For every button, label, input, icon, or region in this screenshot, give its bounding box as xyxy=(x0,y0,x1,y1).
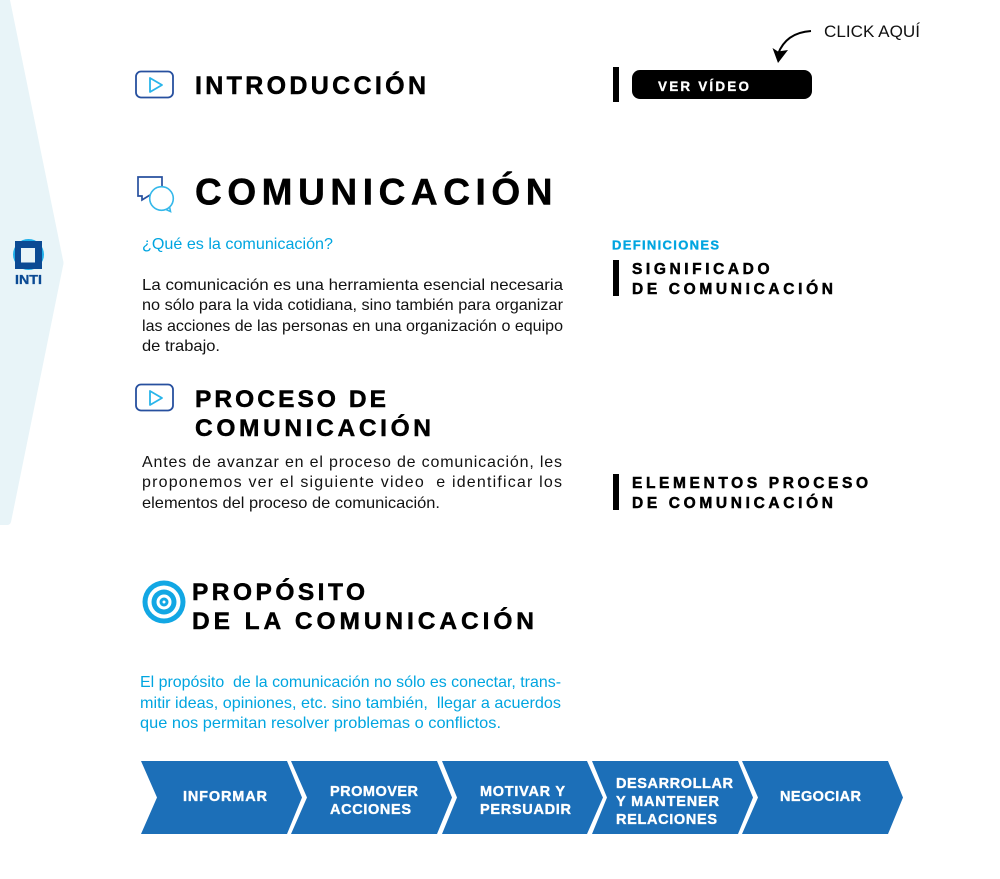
heading: comunicación: COMUNICACIÓN xyxy=(195,170,552,212)
accent bar: significado xyxy=(613,260,619,296)
icon: video proceso xyxy=(136,384,173,410)
link: elementos xyxy=(632,475,868,512)
icon: target xyxy=(142,580,186,624)
button: ver vídeo xyxy=(632,70,812,99)
step: promover acciones: ACCIONES xyxy=(330,802,411,818)
chevron process xyxy=(141,761,903,834)
step: informar: INFORMAR xyxy=(183,789,268,805)
text block: definition: de trabajo. xyxy=(142,338,220,355)
text block: definition: La comunicación es una herramienta esencial necesaria xyxy=(142,277,563,294)
definiciones label: DEFINICIONES xyxy=(612,238,719,252)
step: motivar y persuadir: PERSUADIR xyxy=(480,802,572,818)
INTI logo xyxy=(13,239,44,287)
icon: video intro xyxy=(136,72,173,98)
text block: proceso: proponemos ver el siguiente video e identificar los xyxy=(142,474,562,491)
accent bar: video xyxy=(613,67,619,102)
click label: CLICK AQUÍ xyxy=(824,22,920,41)
step: negociar: NEGOCIAR xyxy=(780,789,862,805)
step: desarrollar xyxy=(592,761,753,834)
heading: proceso: PROCESO DE xyxy=(195,386,386,413)
text block: definition xyxy=(142,277,564,355)
accent bar: elementos xyxy=(613,474,619,510)
subheading: question: ¿Qué es la comunicación? xyxy=(142,236,333,253)
step: motivar y persuadir: MOTIVAR Y xyxy=(480,784,565,800)
text block: definition: las acciones de las personas en una organización o equipo xyxy=(142,318,563,335)
text block: proceso: Antes de avanzar en el proceso de comunicación, les xyxy=(142,454,562,471)
link: elementos: DE COMUNICACIÓN xyxy=(632,494,833,512)
step: negociar xyxy=(742,761,903,834)
text block: propósito: El propósito de la comunicación no sólo es conectar, trans- xyxy=(140,674,561,691)
step: motivar y persuadir xyxy=(442,761,603,834)
heading: proceso: COMUNICACIÓN xyxy=(195,414,431,442)
text block: definition: no sólo para la vida cotidiana, sino también para organizar xyxy=(142,297,564,314)
heading: propósito: DE LA COMUNICACIÓN xyxy=(192,607,534,635)
icon: chat bubbles xyxy=(138,177,173,212)
heading: propósito: PROPÓSITO xyxy=(192,578,365,606)
step: promover acciones xyxy=(291,761,452,834)
side panel xyxy=(0,0,64,525)
heading: proceso xyxy=(195,386,431,442)
arrow: click xyxy=(772,31,811,63)
link: significado: SIGNIFICADO xyxy=(632,261,770,278)
step: desarrollar: Y MANTENER xyxy=(616,794,720,810)
text block: propósito: mitir ideas, opiniones, etc. sino también, llegar a acuerdos xyxy=(140,695,561,712)
text block: proceso xyxy=(142,454,562,512)
heading: introducción: INTRODUCCIÓN xyxy=(195,70,426,100)
link: significado xyxy=(632,261,833,298)
button: ver vídeo: VER VÍDEO xyxy=(658,79,749,94)
text block: propósito: que nos permitan resolver problemas o conflictos. xyxy=(140,715,501,732)
step: desarrollar: DESARROLLAR xyxy=(616,776,734,792)
INTI logo: INTI xyxy=(15,272,42,287)
step: informar xyxy=(141,761,302,834)
step: promover acciones: PROMOVER xyxy=(330,784,419,800)
step: desarrollar: RELACIONES xyxy=(616,812,717,828)
link: elementos: ELEMENTOS PROCESO xyxy=(632,475,868,492)
heading: propósito xyxy=(192,578,534,635)
text block: proceso: elementos del proceso de comunicación. xyxy=(142,495,440,512)
text block: propósito xyxy=(140,674,561,732)
link: significado: DE COMUNICACIÓN xyxy=(632,280,833,298)
